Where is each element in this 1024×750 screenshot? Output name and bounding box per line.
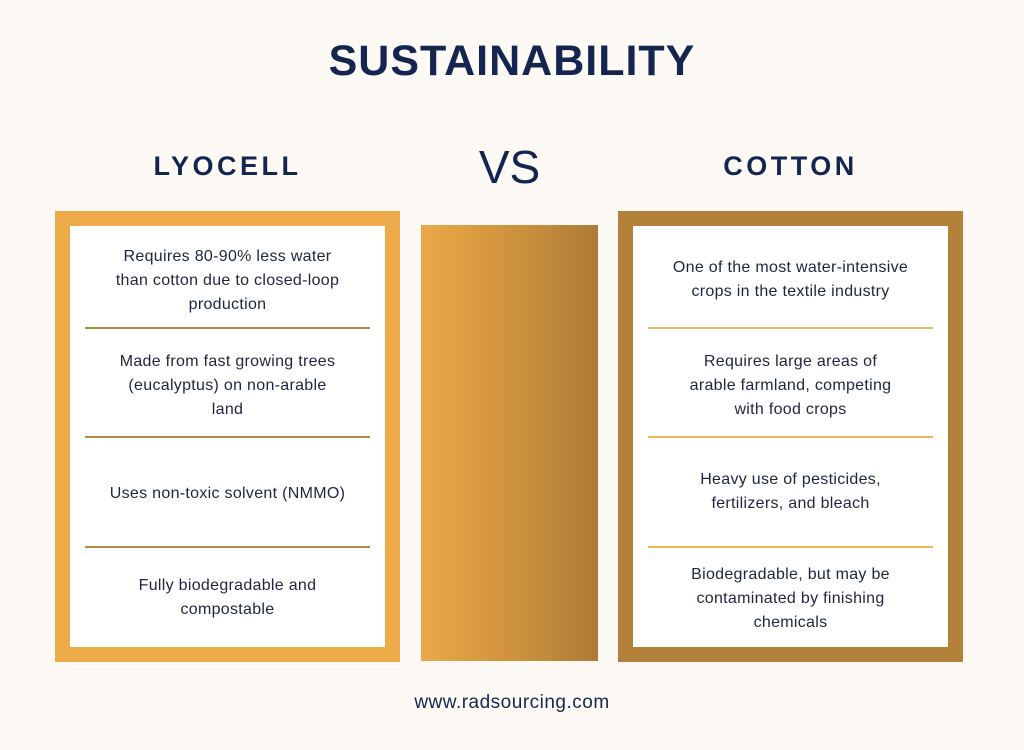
heading: lyocell: LYOCELL xyxy=(153,151,302,181)
footer url: www.radsourcing.com xyxy=(414,692,610,713)
text: farmland: arable farmland, competing xyxy=(690,376,891,394)
heading: vs: VS xyxy=(479,141,540,193)
title: SUSTAINABILITY xyxy=(329,37,695,85)
center gradient bar xyxy=(421,225,598,661)
panel: cotton xyxy=(618,211,963,662)
text: water xyxy=(116,248,339,312)
text: biodegradable xyxy=(691,566,890,630)
text: biodegradable: contaminated by finishing xyxy=(696,590,885,606)
text: biodegradable: chemicals xyxy=(754,614,827,630)
text: pesticides: Heavy use of pesticides, xyxy=(700,471,881,488)
text: water: production xyxy=(189,296,266,312)
text: farmland: Requires large areas of xyxy=(704,352,877,370)
text: biodegradable: Biodegradable, but may be xyxy=(691,566,890,582)
text: pesticides xyxy=(700,471,881,512)
text: trees xyxy=(120,352,335,418)
text: biodegradable: Fully biodegradable and xyxy=(139,576,316,594)
text: biodegradable xyxy=(139,576,316,618)
text: biodegradable: compostable xyxy=(180,600,274,618)
text: farmland xyxy=(690,352,891,418)
heading: cotton: COTTON xyxy=(723,151,858,181)
text: trees: Made from fast growing trees xyxy=(120,352,335,370)
text: water intensive xyxy=(673,258,908,300)
text: solvent: Uses non-toxic solvent (NMMO) xyxy=(110,485,345,502)
text: water intensive: One of the most water-intensive xyxy=(673,258,908,276)
text: trees: (eucalyptus) on non-arable xyxy=(128,376,327,394)
panel: lyocell xyxy=(55,211,400,662)
text: water: Requires 80-90% less water xyxy=(124,248,331,264)
text: water intensive: crops in the textile industry xyxy=(691,282,890,300)
text: farmland: with food crops xyxy=(734,400,847,418)
text: trees: land xyxy=(212,400,243,418)
text: water: than cotton due to closed-loop xyxy=(116,272,339,288)
text: pesticides: fertilizers, and bleach xyxy=(711,495,870,512)
